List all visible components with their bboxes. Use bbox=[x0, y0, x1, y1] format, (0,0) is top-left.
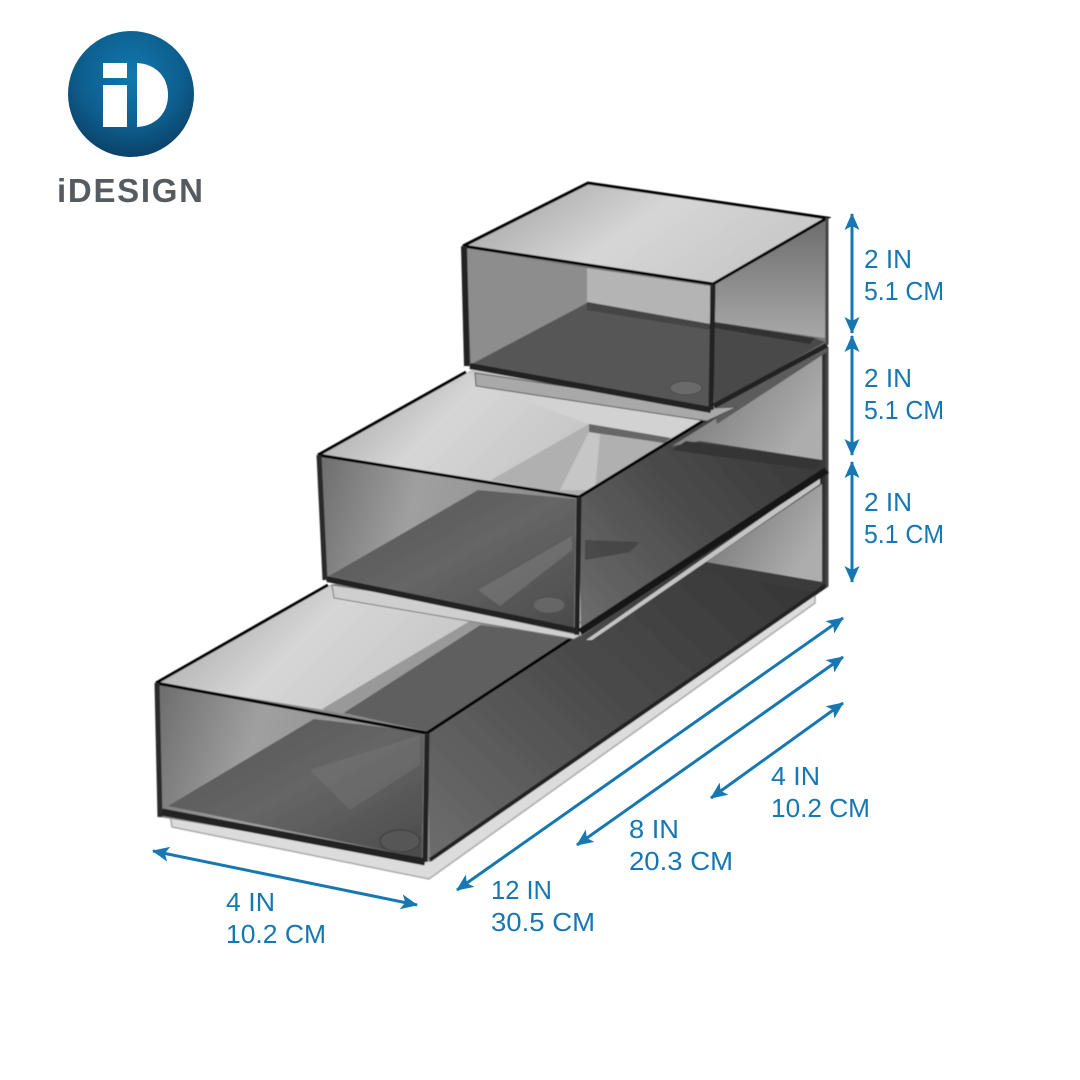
product: stacked bins photo bbox=[156, 183, 827, 879]
label: bottom bin height: 2 IN bbox=[864, 487, 912, 517]
label: 4 in width: 4 IN bbox=[226, 887, 275, 917]
product: top bin bbox=[463, 183, 827, 424]
label: 4 in depth bbox=[771, 761, 870, 823]
bottom bin opening light wall bbox=[158, 585, 472, 710]
label: top bin height: 5.1 CM bbox=[864, 276, 944, 306]
dimension arrow: height top 2 in bbox=[850, 214, 854, 333]
top bin back wall seen through front bbox=[587, 268, 710, 324]
label: top bin height: 2 IN bbox=[864, 244, 912, 274]
middle bin embossed logo bbox=[533, 597, 565, 613]
middle bin inner hole bbox=[491, 424, 671, 497]
middle bin reflection bbox=[585, 540, 640, 560]
middle bin floor through front bbox=[329, 490, 576, 628]
label: 8 in depth bbox=[629, 814, 733, 876]
dimension arrow: height middle 2 in bbox=[850, 336, 854, 455]
top bin edges bbox=[463, 183, 827, 410]
label: middle bin height bbox=[864, 363, 944, 425]
top bin opening bbox=[465, 183, 827, 284]
bottom bin light strip beneath rim bbox=[586, 477, 820, 640]
dimension arrow: depth 4 in bbox=[711, 703, 843, 798]
top bin front wall left part bbox=[466, 248, 587, 364]
label: 4 in width bbox=[226, 887, 326, 949]
bottom bin embossed logo bbox=[380, 830, 420, 852]
clear base of bottom bin bbox=[170, 585, 815, 879]
label: top bin height bbox=[864, 244, 944, 306]
label: 4 in depth: 4 IN bbox=[771, 761, 820, 791]
top bin silhouette bbox=[463, 183, 827, 410]
middle bin far light wall bbox=[672, 352, 822, 460]
dimension arrow: depth 12 in bbox=[457, 618, 843, 890]
clear base of middle bin bbox=[332, 585, 586, 639]
logo: iDESIGN bbox=[57, 31, 203, 209]
top bin right floor bbox=[714, 322, 825, 405]
label: middle bin height: 2 IN bbox=[864, 363, 912, 393]
logo wordmark: iDESIGN bbox=[57, 172, 203, 209]
bottom bin opening dark floor bbox=[340, 625, 578, 732]
label: middle bin height: 5.1 CM bbox=[864, 395, 944, 425]
middle bin front wall bbox=[319, 455, 579, 635]
bottom bin right face bbox=[427, 470, 827, 862]
label: bottom bin height: 5.1 CM bbox=[864, 519, 944, 549]
top bin embossed logo bbox=[670, 381, 702, 395]
label: 12 in depth: 12 IN bbox=[491, 875, 552, 905]
top bin right face bbox=[714, 222, 825, 338]
middle bin right face bbox=[579, 345, 827, 636]
bottom bin floor through front bbox=[168, 719, 424, 858]
logo letter D bbox=[137, 63, 168, 127]
product: middle bin bbox=[318, 345, 827, 639]
dimension arrow: width 4 in bbox=[153, 851, 417, 905]
bottom bin edges bbox=[156, 470, 827, 862]
bottom bin far light wall bbox=[700, 484, 822, 582]
label: 8 in depth: 20.3 CM bbox=[629, 846, 733, 876]
label: 4 in depth: 10.2 CM bbox=[771, 793, 870, 823]
dimension arrow: height bottom 2 in bbox=[850, 462, 854, 582]
label: 12 in depth bbox=[491, 875, 595, 937]
dimension arrow: depth 8 in bbox=[577, 657, 843, 845]
bottom bin silhouette bbox=[156, 470, 827, 862]
logo circle bbox=[68, 31, 194, 157]
top bin floor bbox=[472, 303, 710, 407]
bottom bin front wall bbox=[158, 684, 427, 860]
middle bin opening light wall bbox=[319, 372, 590, 482]
middle bin silhouette bbox=[319, 345, 827, 636]
middle bin edges bbox=[318, 347, 827, 635]
logo letter i bbox=[103, 63, 127, 127]
product: bottom bin bbox=[156, 470, 827, 879]
clear base of top bin bbox=[475, 373, 737, 421]
top bin base strip on right bbox=[712, 345, 827, 424]
label: 4 in width: 10.2 CM bbox=[226, 919, 326, 949]
label: 12 in depth: 30.5 CM bbox=[491, 907, 595, 937]
label: 8 in depth: 8 IN bbox=[629, 814, 679, 844]
label: bottom bin height bbox=[864, 487, 944, 549]
